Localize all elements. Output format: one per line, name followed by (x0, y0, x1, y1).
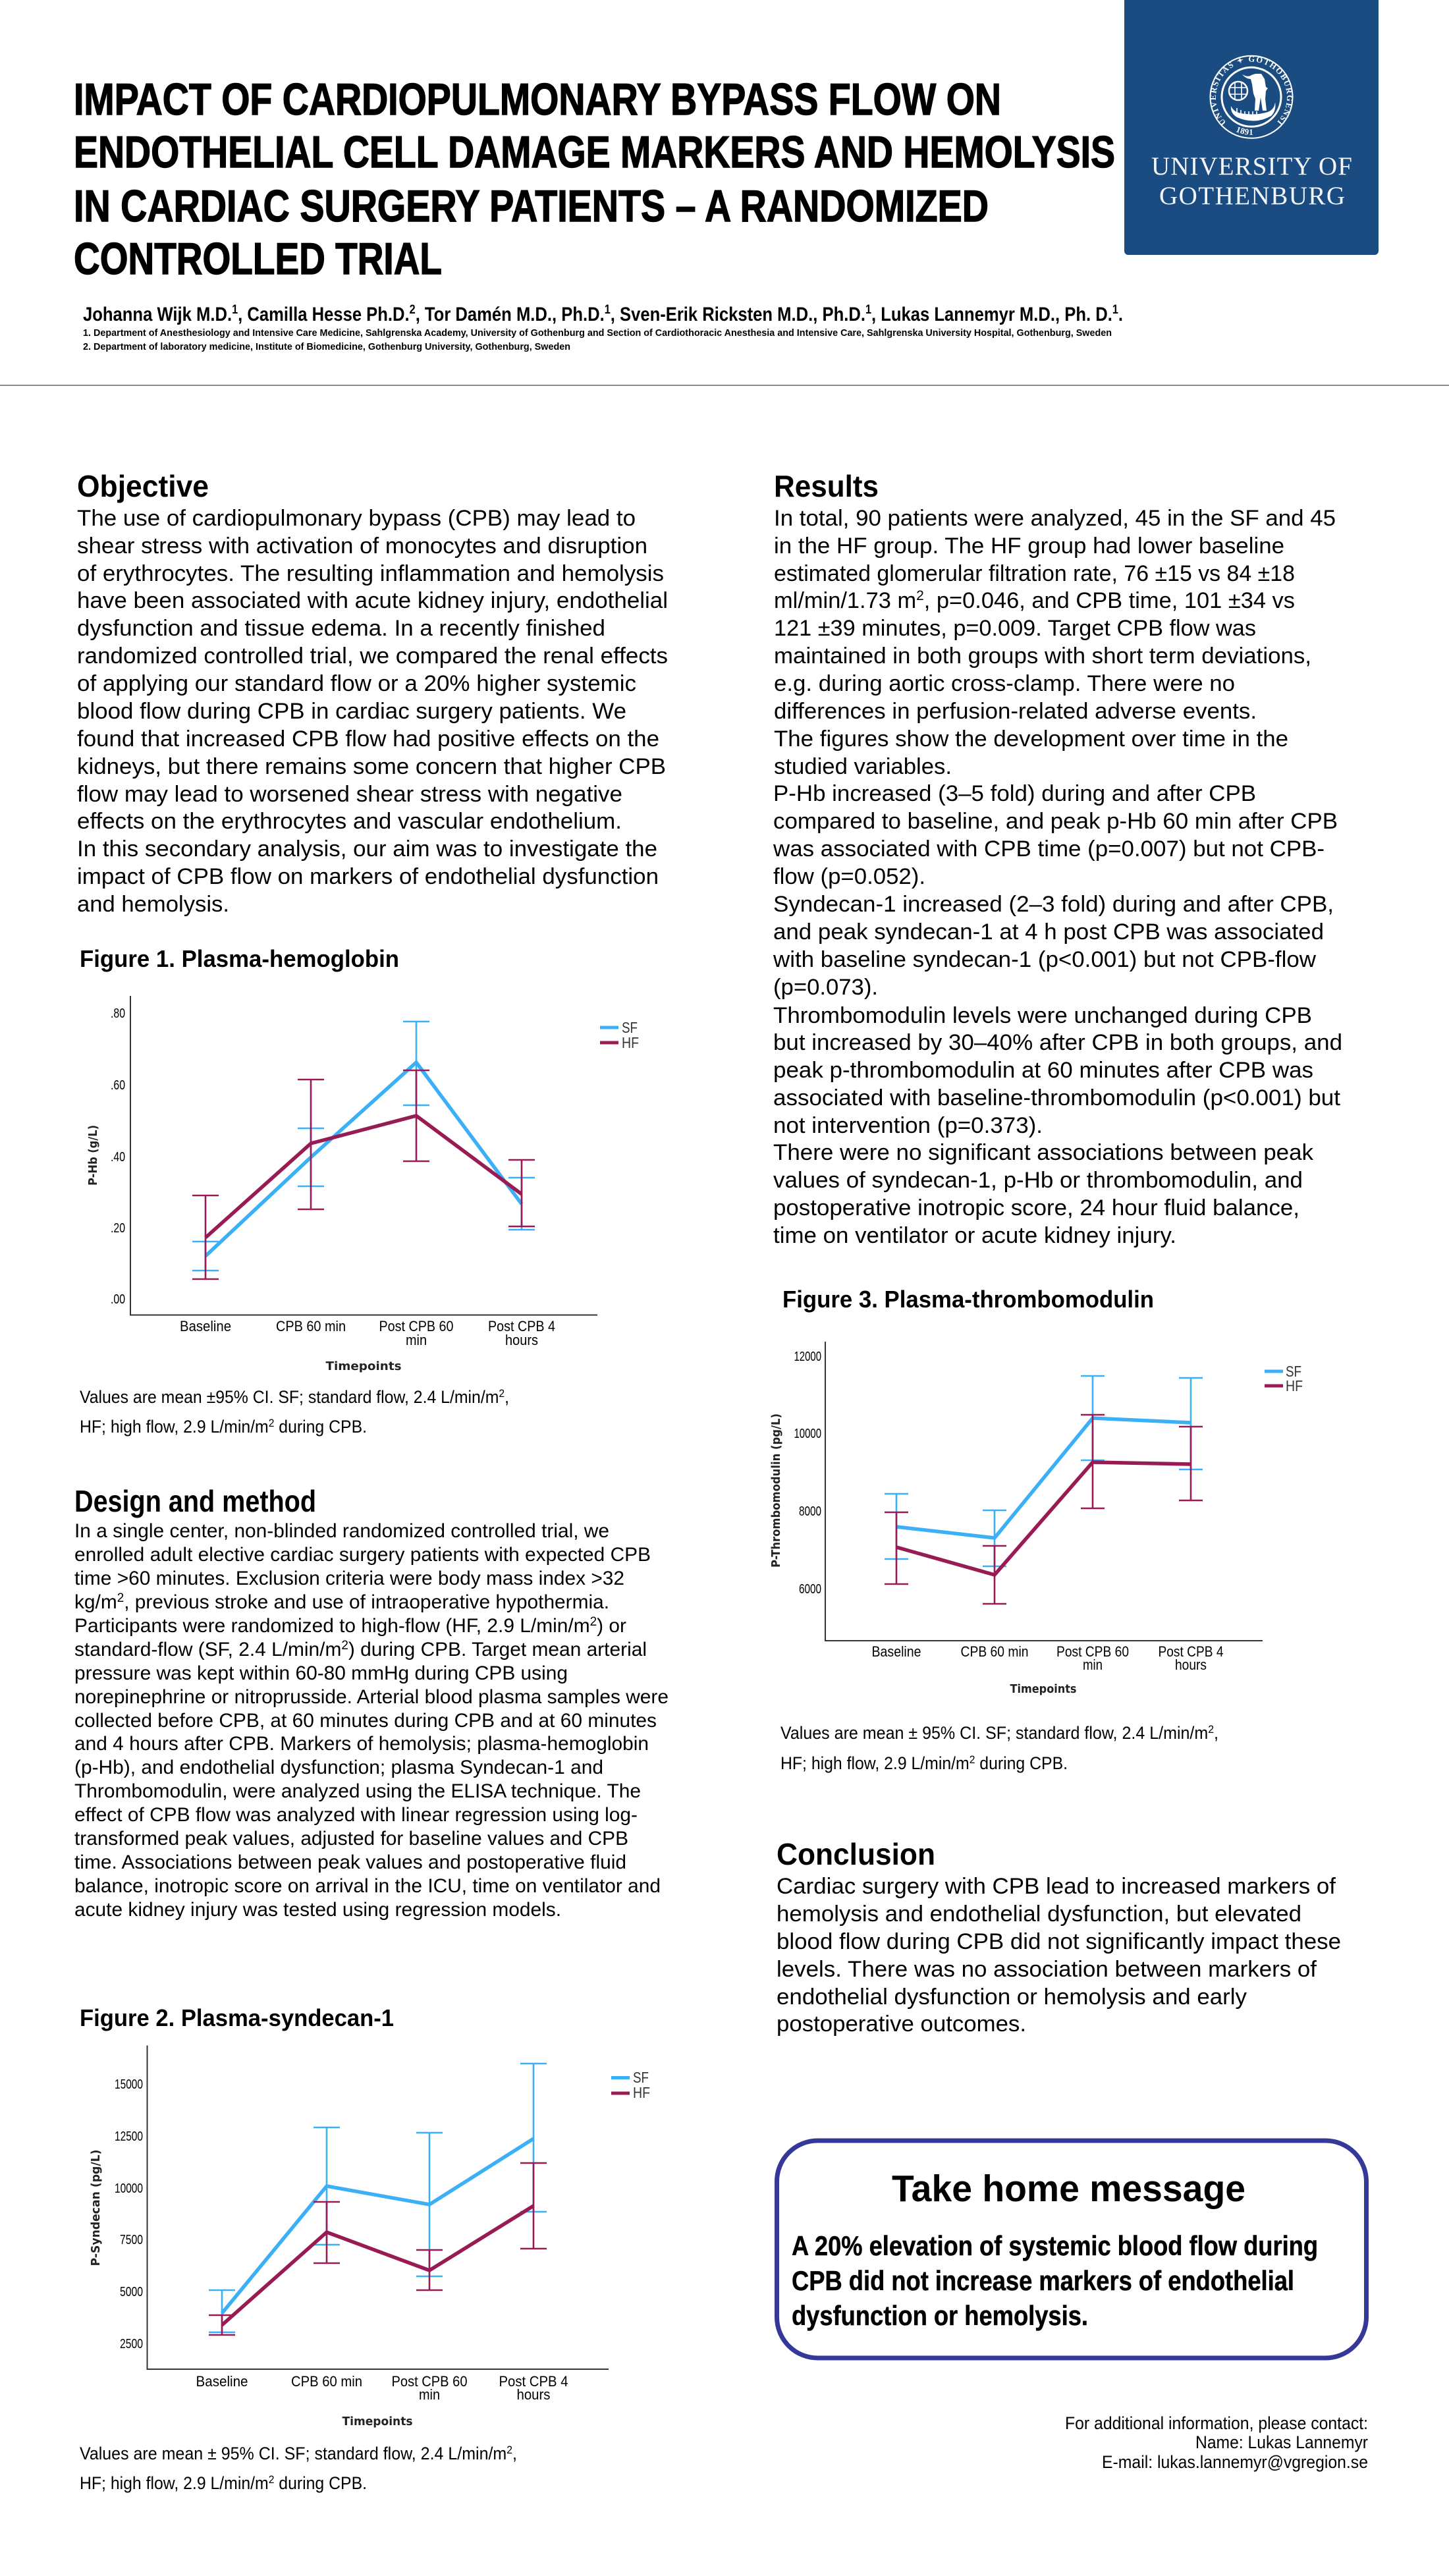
design and method text: enrolled adult elective cardiac surgery patients with expected CPB (74, 1544, 651, 1566)
legend: SF (633, 2069, 649, 2086)
x axis labels (180, 1318, 555, 1348)
heading: objective: Objective (77, 469, 209, 503)
SF series (209, 2064, 547, 2332)
conclusion text: hemolysis and endothelial dysfunction, but elevated (777, 1902, 1301, 1927)
x axis labels: Post CPB 60 (391, 2373, 468, 2390)
logo wordmark: UNIVERSITY OF (1151, 152, 1352, 180)
x axis labels: Post CPB 4 (1158, 1643, 1224, 1660)
y axis ticks (794, 1350, 821, 1597)
objective text: of erythrocytes. The resulting inflammation and hemolysis (77, 561, 664, 586)
figure 3 caption: during CPB. (975, 1753, 1068, 1773)
figure 1 caption: 2 (499, 1387, 505, 1400)
x axis labels (196, 2373, 568, 2403)
legend: SF (622, 1019, 638, 1036)
figure 3 caption: 2 (970, 1753, 975, 1766)
panel: results (773, 469, 1342, 1248)
panel: objective (77, 469, 668, 917)
y axis ticks: .60 (111, 1078, 125, 1093)
objective text: dysfunction and tissue edema. In a recently finished (77, 616, 605, 641)
results text: associated with baseline-thrombomodulin (p<0.001) but (773, 1085, 1340, 1110)
HF series (209, 2163, 547, 2335)
results text: Thrombomodulin levels were unchanged during CPB (773, 1003, 1312, 1028)
x axis labels: Baseline (196, 2373, 248, 2390)
results text: with baseline syndecan-1 (p<0.001) but not CPB-flow (773, 947, 1316, 972)
design and method text: Participants were randomized to high-flow (HF, 2.9 L/min/m (74, 1615, 591, 1637)
results text: was associated with CPB time (p=0.007) but not CPB- (773, 836, 1325, 862)
icon: university seal (1209, 55, 1294, 139)
logo: University of Gothenburg (1124, 0, 1379, 255)
y axis ticks: .00 (111, 1292, 125, 1307)
figure 2 caption: Values are mean ± 95% CI. SF; standard flow, 2.4 L/min/m (80, 2444, 541, 2463)
logo wordmark (1151, 152, 1352, 210)
y axis ticks: 7500 (120, 2233, 143, 2247)
conclusion text: blood flow during CPB did not significantly impact these (777, 1929, 1341, 1954)
authors: 1 (865, 303, 871, 317)
design and method text: kg/m (74, 1591, 117, 1613)
objective text: In this secondary analysis, our aim was to investigate the (77, 836, 657, 862)
contact information: E-mail: lukas.lannemyr@vgregion.se (1102, 2452, 1368, 2472)
figure 2 caption: 2 (506, 2444, 512, 2456)
callout heading: Take home message (892, 2168, 1245, 2210)
conclusion text (777, 1874, 1341, 2037)
heading: results: Results (774, 469, 879, 503)
design and method text: time >60 minutes. Exclusion criteria were body mass index >32 (74, 1568, 624, 1589)
design and method text: ) during CPB. Target mean arterial (348, 1639, 647, 1660)
y axis ticks (115, 2077, 143, 2351)
results text: not intervention (p=0.373). (773, 1113, 1043, 1138)
x axis labels: min (419, 2386, 440, 2403)
results text: Syndecan-1 increased (2–3 fold) during and after CPB, (773, 892, 1334, 917)
x axis labels: hours (505, 1332, 538, 1348)
objective text: randomized controlled trial, we compared the renal effects (77, 644, 668, 669)
line chart: plasma-hemoglobin (86, 996, 639, 1373)
y axis ticks: 5000 (120, 2285, 143, 2299)
y axis ticks (111, 1006, 125, 1307)
x axis labels: Post CPB 60 (1056, 1643, 1129, 1660)
SF series (192, 1022, 535, 1271)
authors: , Tor Damén M.D., Ph.D. (416, 304, 605, 325)
contact information: For additional information, please contact: (1065, 2413, 1368, 2433)
affiliations: 1. Department of Anesthesiology and Intensive Care Medicine, Sahlgrenska Academy, University of Gothenburg and Section of Cardiothoracic Anesthesia and Intensive Care, Sahlgrenska University Hospital, Gothenburg, Sweden (83, 327, 1112, 339)
objective text: of applying our standard flow or a 20% higher systemic (77, 671, 636, 696)
callout text: A 20% elevation of systemic blood flow during (792, 2230, 1318, 2261)
figure 2 caption: 2 (269, 2473, 274, 2486)
x axis labels: Baseline (180, 1318, 231, 1334)
results text: maintained in both groups with short term deviations, (774, 644, 1311, 669)
y axis label: P-Hb (g/L) (86, 1125, 100, 1186)
design and method text: , previous stroke and use of intraoperative hypothermia. (124, 1591, 609, 1613)
results text: differences in perfusion-related adverse events. (774, 699, 1257, 724)
figure 2 caption: during CPB. (274, 2473, 367, 2493)
y axis ticks: .20 (111, 1221, 125, 1236)
design and method text: collected before CPB, at 60 minutes during CPB and at 60 minutes (74, 1710, 657, 1732)
legend (600, 1019, 639, 1051)
contact information (1065, 2413, 1368, 2472)
y axis ticks: .40 (111, 1150, 125, 1165)
y axis ticks: 6000 (799, 1582, 821, 1597)
design and method text: ) or (597, 1615, 626, 1637)
y axis ticks: 10000 (115, 2181, 143, 2196)
conclusion text: Cardiac surgery with CPB lead to increased markers of (777, 1874, 1336, 1899)
legend: SF (1286, 1363, 1301, 1380)
design and method text: balance, inotropic score on arrival in the ICU, time on ventilator and (74, 1875, 661, 1897)
results text: (p=0.073). (773, 975, 878, 1000)
x axis labels: hours (1175, 1657, 1207, 1673)
x axis labels: CPB 60 min (276, 1318, 346, 1334)
y axis label: P-Thrombomodulin (pg/L) (769, 1413, 783, 1568)
authors: 1 (1112, 303, 1118, 317)
affiliations: 2. Department of laboratory medicine, Institute of Biomedicine, Gothenburg University, Gothenburg, Sweden (83, 341, 570, 352)
results text: 2 (916, 588, 924, 603)
results text: values of syndecan-1, p-Hb or thrombomodulin, and (773, 1168, 1303, 1193)
title: IMPACT OF CARDIOPULMONARY BYPASS FLOW ON (74, 74, 1001, 124)
y axis ticks: 10000 (794, 1427, 821, 1441)
authors: , Sven-Erik Ricksten M.D., Ph.D. (611, 304, 865, 325)
results text: and peak syndecan-1 at 4 h post CPB was associated (773, 919, 1324, 945)
figure 2 caption: HF; high flow, 2.9 L/min/m (80, 2473, 285, 2493)
callout text: CPB did not increase markers of endothelial (792, 2265, 1294, 2296)
x axis labels: min (406, 1332, 427, 1348)
results text: compared to baseline, and peak p-Hb 60 min after CPB (773, 809, 1338, 834)
x axis labels: Post CPB 4 (488, 1318, 555, 1334)
objective text: flow may lead to worsened shear stress with negative (77, 782, 622, 807)
figure 1 title: Figure 1. Plasma-hemoglobin (80, 945, 399, 972)
design and method text: standard-flow (SF, 2.4 L/min/m (74, 1639, 342, 1660)
y axis ticks: 12500 (115, 2129, 143, 2144)
conclusion text: endothelial dysfunction or hemolysis and early (777, 1985, 1247, 2010)
title: IN CARDIAC SURGERY PATIENTS – A RANDOMIZED (74, 181, 989, 231)
panel: conclusion (777, 1837, 1341, 2037)
figure 1 caption: , (505, 1387, 509, 1407)
figure 3 title: Figure 3. Plasma-thrombomodulin (782, 1286, 1154, 1313)
objective text: and hemolysis. (77, 892, 229, 917)
results text: P-Hb increased (3–5 fold) during and after CPB (773, 781, 1256, 806)
figure 3 caption (780, 1723, 1218, 1773)
objective text: effects on the erythrocytes and vascular endothelium. (77, 809, 622, 834)
affiliations (83, 327, 1112, 352)
results text: in the HF group. The HF group had lower baseline (774, 534, 1284, 559)
panel: figure 2 (80, 2004, 650, 2493)
objective text (77, 506, 668, 917)
icon: university seal: 1891 (1236, 126, 1253, 135)
x axis labels: Post CPB 60 (379, 1318, 453, 1334)
results text: , p=0.046, and CPB time, 101 ±34 vs (924, 588, 1295, 613)
title: CONTROLLED TRIAL (74, 234, 442, 284)
x axis labels: min (1083, 1657, 1103, 1673)
x axis labels: Post CPB 4 (499, 2373, 568, 2390)
y axis ticks: 12000 (794, 1350, 821, 1364)
objective text: impact of CPB flow on markers of endothelial dysfunction (77, 864, 659, 889)
figure 3 caption: HF; high flow, 2.9 L/min/m (780, 1753, 986, 1773)
y axis ticks: 15000 (115, 2077, 143, 2092)
figure 1 caption: Values are mean ±95% CI. SF; standard flow, 2.4 L/min/m (80, 1387, 536, 1407)
design and method text: 2 (341, 1639, 348, 1653)
results text: In total, 90 patients were analyzed, 45 in the SF and 45 (774, 506, 1336, 531)
design and method text: acute kidney injury was tested using regression models. (74, 1899, 561, 1921)
authors: , Lukas Lannemyr M.D., Ph. D. (871, 304, 1112, 325)
y axis ticks: 2500 (120, 2337, 143, 2351)
x axis title: Timepoints (325, 1359, 402, 1373)
results text: ml/min/1.73 m (774, 588, 917, 613)
results text: postoperative inotropic score, 24 hour fluid balance, (773, 1195, 1299, 1220)
design and method text: Thrombomodulin, were analyzed using the ELISA technique. The (74, 1780, 641, 1802)
objective text: The use of cardiopulmonary bypass (CPB) may lead to (77, 506, 636, 531)
x axis labels (872, 1643, 1224, 1673)
objective text: shear stress with activation of monocytes and disruption (77, 534, 647, 559)
legend: HF (1286, 1377, 1303, 1394)
figure 3 caption: 2 (1208, 1723, 1214, 1736)
x axis labels: hours (516, 2386, 551, 2403)
objective text: kidneys, but there remains some concern that higher CPB (77, 754, 666, 779)
figure 1 caption: during CPB. (274, 1417, 367, 1437)
figure 3 caption: , (1214, 1723, 1218, 1743)
results text: studied variables. (774, 754, 952, 779)
legend (1265, 1363, 1303, 1394)
panel: figure 1 (80, 945, 639, 1437)
design and method text: 2 (590, 1615, 597, 1629)
objective text: found that increased CPB flow had positive effects on the (77, 726, 659, 752)
logo wordmark: GOTHENBURG (1159, 182, 1345, 210)
results text: 121 ±39 minutes, p=0.009. Target CPB flow was (774, 616, 1256, 641)
y axis ticks: .80 (111, 1006, 125, 1021)
legend: HF (633, 2084, 650, 2101)
figure 1 caption: 2 (269, 1417, 274, 1429)
results text: flow (p=0.052). (773, 864, 925, 889)
panel: figure 3 (769, 1286, 1303, 1773)
x axis labels: Baseline (872, 1643, 921, 1660)
design and method text: (p-Hb), and endothelial dysfunction; plasma Syndecan-1 and (74, 1757, 603, 1778)
figure 3 caption: Values are mean ± 95% CI. SF; standard flow, 2.4 L/min/m (780, 1723, 1242, 1743)
results text: time on ventilator or acute kidney injury. (773, 1223, 1176, 1248)
legend (611, 2069, 650, 2101)
design and method text: 2 (117, 1591, 124, 1605)
HF series (192, 1070, 535, 1279)
results text: e.g. during aortic cross-clamp. There were no (774, 671, 1235, 696)
title: ENDOTHELIAL CELL DAMAGE MARKERS AND HEMOLYSIS (74, 127, 1115, 177)
x axis labels: CPB 60 min (960, 1643, 1029, 1660)
heading: conclusion: Conclusion (777, 1837, 935, 1871)
design and method text (74, 1520, 669, 1921)
authors: 1 (605, 303, 611, 317)
SF series (885, 1376, 1203, 1566)
results text: The figures show the development over time in the (774, 726, 1288, 752)
contact information: Name: Lukas Lannemyr (1195, 2432, 1368, 2452)
objective text: have been associated with acute kidney injury, endothelial (77, 588, 668, 613)
design and method text: norepinephrine or nitroprusside. Arterial blood plasma samples were (74, 1686, 669, 1708)
y axis ticks: 8000 (799, 1504, 821, 1519)
objective text: blood flow during CPB in cardiac surgery patients. We (77, 699, 626, 724)
results text: estimated glomerular filtration rate, 76 ±15 vs 84 ±18 (774, 561, 1295, 586)
design and method text: and 4 hours after CPB. Markers of hemolysis; plasma-hemoglobin (74, 1733, 649, 1755)
x axis title: Timepoints (1010, 1682, 1076, 1696)
authors: , Camilla Hesse Ph.D. (238, 304, 410, 325)
design and method text: transformed peak values, adjusted for baseline values and CPB (74, 1828, 628, 1850)
figure 2 caption: , (512, 2444, 517, 2463)
callout: take home message (777, 2141, 1366, 2358)
line chart: plasma-thrombomodulin (769, 1342, 1303, 1696)
x axis labels: CPB 60 min (291, 2373, 362, 2390)
design and method text: In a single center, non-blinded randomized controlled trial, we (74, 1520, 609, 1542)
conclusion text: postoperative outcomes. (777, 2012, 1026, 2037)
design and method text: pressure was kept within 60-80 mmHg during CPB using (74, 1662, 568, 1684)
figure 1 caption (80, 1387, 509, 1437)
design and method text: time. Associations between peak values and postoperative fluid (74, 1851, 626, 1873)
figure 2 caption (80, 2444, 517, 2493)
figure 2 title: Figure 2. Plasma-syndecan-1 (80, 2004, 394, 2031)
results text: but increased by 30–40% after CPB in both groups, and (773, 1030, 1342, 1055)
authors: 2 (410, 303, 416, 317)
heading: design and method: Design and method (74, 1484, 316, 1518)
figure 1 caption: HF; high flow, 2.9 L/min/m (80, 1417, 285, 1437)
legend: HF (622, 1034, 639, 1051)
results text: peak p-thrombomodulin at 60 minutes after CPB was (773, 1058, 1313, 1083)
callout text: dysfunction or hemolysis. (792, 2300, 1088, 2331)
design and method text: effect of CPB flow was analyzed with linear regression using log- (74, 1804, 638, 1826)
y axis label: P-Syndecan (pg/L) (89, 2150, 103, 2266)
results text (773, 506, 1342, 1248)
callout text (792, 2230, 1318, 2331)
line chart: plasma-syndecan-1 (89, 2046, 650, 2428)
authors: . (1118, 304, 1123, 325)
HF series (885, 1415, 1203, 1604)
x axis title: Timepoints (342, 2415, 412, 2428)
panel: design and method (74, 1484, 669, 1921)
title (74, 74, 1115, 284)
authors: Johanna Wijk M.D. (83, 304, 258, 325)
results text: There were no significant associations between peak (773, 1140, 1314, 1165)
conclusion text: levels. There was no association between markers of (777, 1957, 1317, 1982)
authors: 1 (232, 303, 238, 317)
